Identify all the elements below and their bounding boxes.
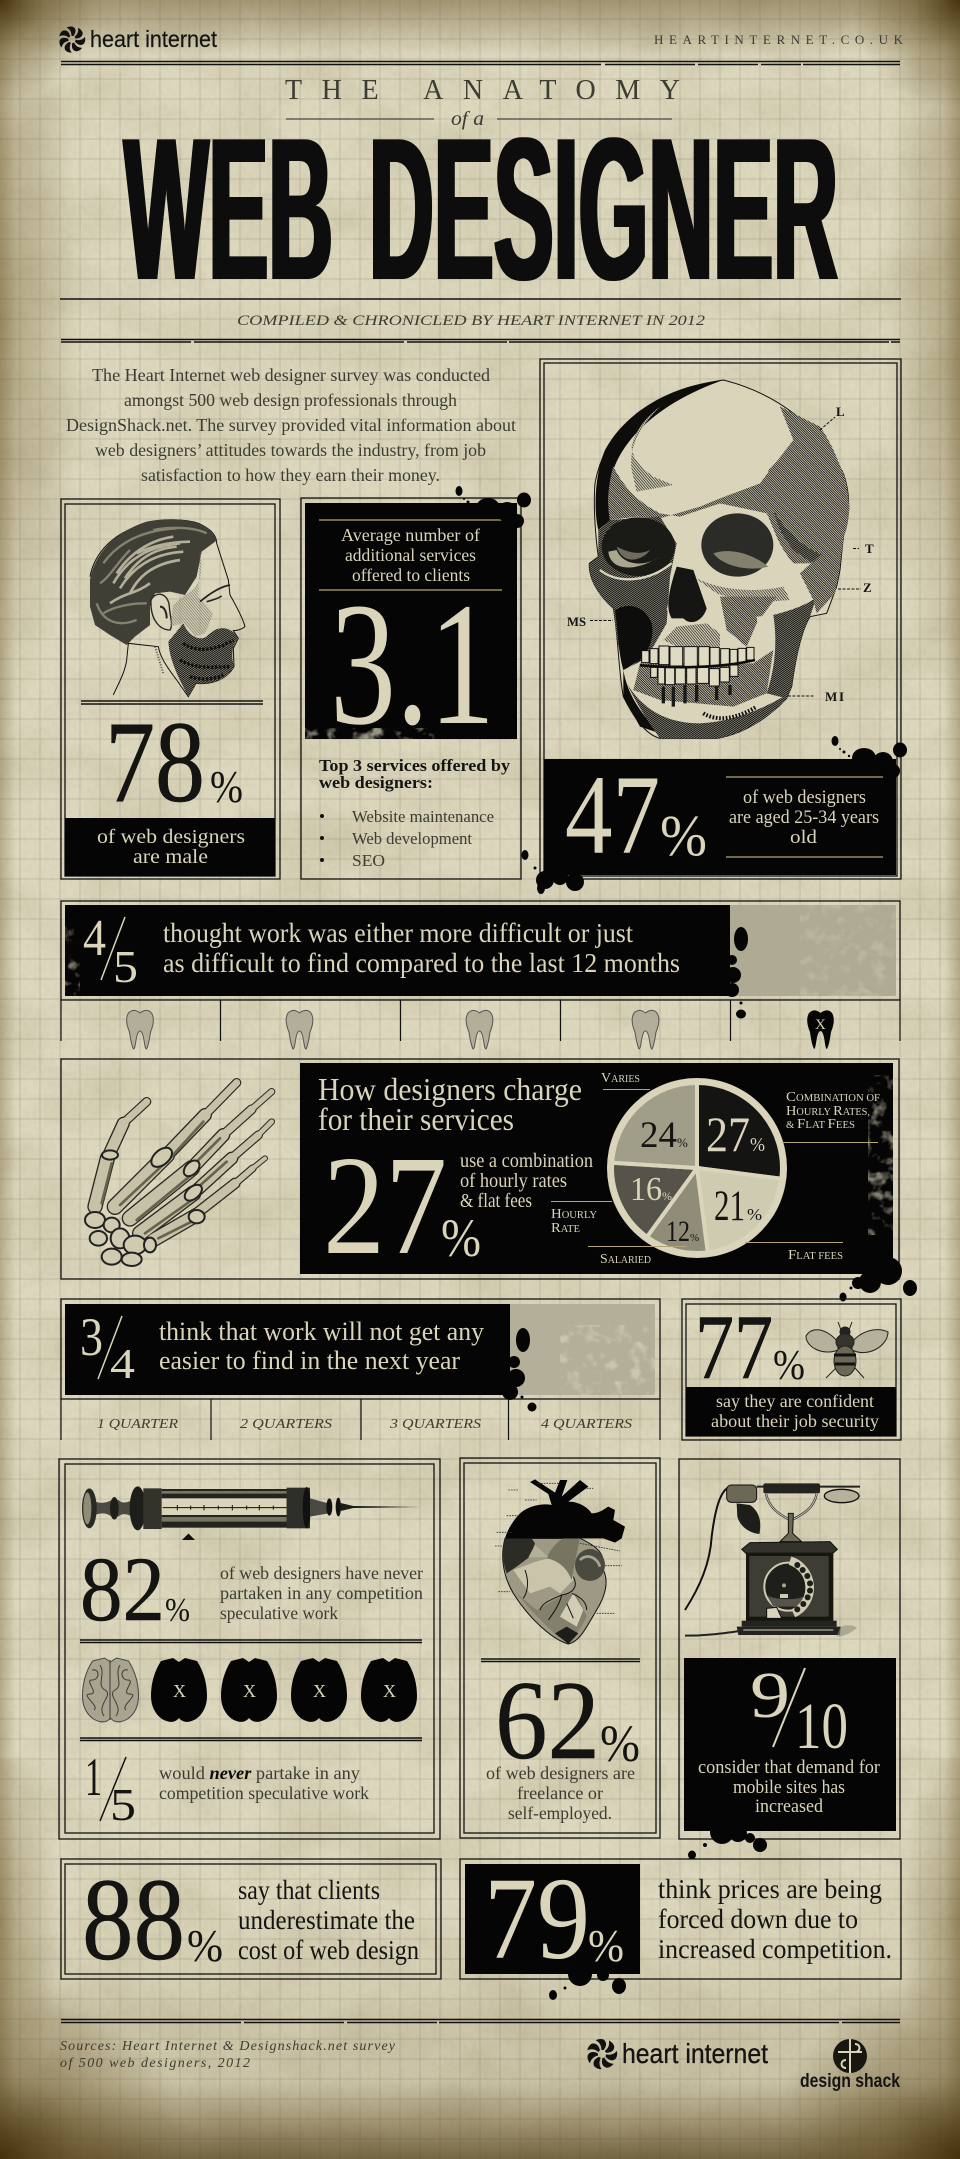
- black box: job security: say they are confident: [716, 1391, 874, 1411]
- top 3 services list: web designers:: [319, 773, 433, 792]
- stat: 82%: %: [165, 1592, 190, 1629]
- illustration: anatomical heart: [495, 1479, 625, 1644]
- stat: 27%: 27: [323, 1126, 447, 1284]
- panel: 82% speculative work: [59, 1459, 440, 1839]
- skull labels: T: [865, 541, 874, 556]
- black band: [65, 1304, 510, 1395]
- intro text: The Heart Internet web designer survey was conducted: [92, 365, 490, 385]
- black box: job security: about their job security: [711, 1411, 879, 1431]
- pie chart labels: SALARIED: [600, 1252, 651, 1267]
- quarters row: 1 QUARTER: [97, 1417, 178, 1432]
- intro text: amongst 500 web design professionals through: [124, 390, 457, 410]
- skull labels: Z: [863, 580, 872, 595]
- pie chart labels: FLAT FEES: [788, 1248, 843, 1263]
- title line: web designer: [124, 96, 838, 323]
- text: clients underestimate: cost of web design: [238, 1935, 419, 1965]
- pie chart labels: & FLAT FEES: [786, 1117, 855, 1132]
- footer logo: heart internet: heart internet: [622, 2038, 768, 2069]
- brain icons: 1 of 5: [82, 1658, 417, 1722]
- fraction: 4/5: 5: [113, 941, 138, 992]
- heading: [318, 1071, 582, 1137]
- fraction: 3/4: [80, 1307, 135, 1388]
- stat: 78%: 78: [105, 698, 205, 827]
- title line: the anatomy: THE ANATOMY: [285, 75, 680, 106]
- skull labels: MS: [567, 614, 586, 629]
- pie chart: %: [662, 1189, 672, 1203]
- text: would never partake: [159, 1763, 369, 1803]
- double rule: [81, 701, 263, 704]
- footer logo: design shack: [800, 2039, 900, 2092]
- texture strip: [730, 905, 896, 996]
- black box: 47% stat: 47: [565, 753, 660, 878]
- quarters row: 3 QUARTERS: [389, 1417, 481, 1432]
- text: freelance: freelance or: [517, 1783, 603, 1803]
- top 3 services list: [319, 756, 511, 870]
- black band: as difficult to find compared to the last 12 months: [163, 948, 680, 978]
- heading: How designers charge: [318, 1071, 582, 1107]
- pie chart: 27: [706, 1106, 750, 1162]
- stat: 88%: %: [187, 1920, 223, 1971]
- panel: 79% prices forced down: [460, 1853, 901, 2000]
- title line: of a: of a: [451, 108, 484, 130]
- icon: tooth: [466, 1010, 493, 1049]
- ink splat: [840, 1257, 917, 1302]
- pie chart: %: [677, 1135, 688, 1150]
- panel: how designers charge: [61, 1059, 917, 1302]
- black box: are male: [65, 818, 275, 876]
- sources: Sources: Heart Internet & Designshack.net survey: [60, 2039, 396, 2054]
- black box: 79%: [465, 1853, 640, 1984]
- black box: are male: are male: [133, 846, 208, 868]
- fraction: 1/5: [85, 1747, 136, 1830]
- skull labels: L: [836, 404, 845, 419]
- panel: 3.1 additional services: [301, 498, 521, 879]
- text: never partaken: [220, 1563, 423, 1623]
- sources: of 500 web designers, 2012: [60, 2056, 250, 2071]
- pie chart: 21: [714, 1183, 745, 1230]
- stat: 27%: of hourly rates: [460, 1170, 567, 1192]
- text: never partaken: partaken in any competition: [220, 1583, 423, 1603]
- text: freelance: [486, 1763, 635, 1823]
- black box: average services: 3.1: [330, 567, 495, 762]
- footer double rule: [61, 2020, 900, 2022]
- fraction: 9/10: 9: [750, 1659, 790, 1732]
- top 3 services list: Website maintenance: [352, 807, 494, 826]
- panel: 77% job security: [682, 1296, 901, 1440]
- black box: average services: offered to clients: [352, 565, 470, 585]
- icon: black tooth with X: [807, 1010, 834, 1049]
- stat: 88%: 88: [82, 1854, 185, 1985]
- quarters row: [61, 1399, 660, 1440]
- skull labels: MI: [825, 689, 844, 704]
- black box: demand for mobile: mobile sites has: [733, 1777, 845, 1798]
- black box: 47% stat: are aged 25-34 years: [729, 807, 879, 828]
- illustration: syringe: [82, 1486, 419, 1530]
- text: never partaken: speculative work: [220, 1603, 338, 1623]
- stat: 27%: [323, 1126, 593, 1284]
- icon: tooth: [127, 1010, 153, 1049]
- black box: 47% stat: %: [660, 803, 707, 868]
- stat: 27%: use a combination: [460, 1150, 593, 1172]
- stat: 77%: %: [773, 1343, 805, 1389]
- header logo: heart internet: heart internet: [90, 26, 218, 52]
- stat: 77%: 77: [695, 1296, 773, 1398]
- fraction: 3/4: 3: [80, 1307, 103, 1367]
- illustration: hand skeleton: [85, 1083, 272, 1266]
- stat: 82%: 82: [80, 1538, 165, 1640]
- black box: charging: [300, 1063, 893, 1284]
- top 3 services list: Web development: [352, 829, 472, 848]
- text: clients underestimate: [238, 1875, 419, 1965]
- illustration: skull: [589, 380, 849, 738]
- panel: 3/4 next year: [61, 1299, 660, 1412]
- fraction: 4/5: 4: [83, 910, 106, 967]
- title: [124, 75, 838, 323]
- text: clients underestimate: underestimate the: [238, 1905, 415, 1935]
- icon: black brain X: X: [243, 1681, 256, 1701]
- pie chart: %: [690, 1232, 699, 1244]
- text: never partaken: of web designers have never: [220, 1563, 423, 1583]
- top 3 services list: SEO: [352, 851, 385, 870]
- text: freelance: self-employed.: [508, 1803, 612, 1823]
- ink splat: [549, 1962, 626, 2000]
- black box: average services: [305, 503, 517, 762]
- black box: 79%: 79: [484, 1853, 590, 1984]
- ink splat: [725, 927, 748, 1018]
- text: freelance: of web designers are: [486, 1763, 635, 1783]
- intro text: web designers’ attitudes towards the industry, from job: [95, 440, 486, 460]
- stat: 27%: %: [441, 1208, 481, 1268]
- subtitle band: COMPILED & CHRONICLED BY HEART INTERNET IN 2012: [237, 313, 706, 329]
- fraction: 1/5: 1: [85, 1747, 102, 1807]
- black box: are male: of web designers: [97, 826, 245, 848]
- ink splat: [502, 1328, 536, 1412]
- icon: black brain X: [221, 1658, 277, 1722]
- icon: black tooth with X: X: [815, 1017, 826, 1033]
- panel: 88% underestimate: [61, 1854, 441, 1985]
- icon: black brain X: X: [383, 1681, 396, 1701]
- black band: easier to find in the next year: [159, 1346, 460, 1375]
- quarters row: 2 QUARTERS: [240, 1417, 332, 1432]
- pie chart labels: HOURLY RATES,: [786, 1104, 870, 1119]
- pie chart: 16: [630, 1171, 662, 1208]
- black box: average services: additional services: [345, 545, 476, 565]
- text: prices forced down: [658, 1874, 892, 1964]
- pie chart: 24: [640, 1115, 677, 1156]
- fraction: 3/4: 4: [110, 1342, 135, 1388]
- black box: 47% stat: of web designers: [743, 787, 866, 808]
- panel: 78% male: [61, 499, 280, 879]
- heading: for their services: [318, 1101, 514, 1137]
- pie chart labels: HOURLY: [551, 1207, 597, 1222]
- black box: job security: [686, 1387, 896, 1436]
- skull labels: [567, 404, 874, 704]
- stat: 62%: %: [600, 1716, 640, 1773]
- website address: HEARTINTERNET.CO.UK: [654, 32, 904, 47]
- text: prices forced down: increased competition.: [658, 1934, 892, 1964]
- footer logo: design shack: design shack: [800, 2071, 900, 2092]
- intro text: satisfaction to how they earn their money.: [141, 465, 440, 485]
- pie chart labels: COMBINATION OF: [786, 1090, 880, 1105]
- double rule: [481, 1659, 640, 1662]
- pie chart labels: VARIES: [601, 1071, 640, 1086]
- top 3 services list: Top 3 services offered by: [319, 756, 511, 775]
- black band: think that work will not get any: [159, 1317, 484, 1346]
- black band: [65, 905, 730, 996]
- sources: [60, 2039, 396, 2071]
- pie chart: %: [747, 1205, 762, 1224]
- fraction: 1/5: 5: [110, 1779, 136, 1830]
- ink splats around top panels: [456, 486, 907, 894]
- icon: black brain X: [361, 1658, 417, 1722]
- text: would never partake: would never partake in any: [159, 1763, 360, 1783]
- black box: demand for mobile: increased: [755, 1796, 823, 1817]
- fraction: 9/10: [750, 1659, 848, 1763]
- panel: 62% freelance: [460, 1458, 660, 1838]
- panel: 4/5 work harder to find: [61, 901, 900, 1018]
- pie chart: [607, 1078, 787, 1258]
- illustration: bearded man: [90, 519, 245, 697]
- illustration: vintage telephone: [685, 1483, 860, 1637]
- header double rule: [61, 62, 900, 64]
- intro text: DesignShack.net. The survey provided vital information about: [66, 415, 516, 435]
- text: prices forced down: think prices are being: [658, 1874, 882, 1904]
- fraction: 9/10: 10: [795, 1690, 848, 1763]
- black box: demand for mobile: consider that demand for: [698, 1757, 881, 1778]
- stat: 27%: & flat fees: [460, 1190, 532, 1212]
- stat: 62%: 62: [495, 1659, 600, 1783]
- icon: black brain X: [151, 1658, 207, 1722]
- icon: bee: [806, 1322, 888, 1378]
- fraction: 4/5: [83, 910, 138, 992]
- icon: tooth: [286, 1010, 313, 1049]
- texture strip: [510, 1304, 655, 1395]
- icon: black brain X: [291, 1658, 347, 1722]
- intro text: [66, 365, 516, 485]
- text: would never partake: competition speculative work: [159, 1783, 369, 1803]
- text: clients underestimate: say that clients: [238, 1875, 380, 1905]
- double rule: [80, 1738, 422, 1740]
- icon: black brain X: X: [313, 1681, 326, 1701]
- pie chart: %: [750, 1134, 765, 1156]
- pie chart labels: RATE: [551, 1221, 580, 1236]
- black box: demand for mobile: [684, 1658, 896, 1831]
- stat: 78%: %: [210, 762, 243, 812]
- title line: web designer: WEB: [124, 96, 333, 323]
- icon: brain: [82, 1658, 138, 1722]
- text: prices forced down: forced down due to: [658, 1904, 858, 1934]
- quarters row: 4 QUARTERS: [541, 1417, 632, 1432]
- panel: 9/10 mobile demand: [679, 1459, 900, 1860]
- marker triangle: [182, 1534, 195, 1540]
- icon: tooth: [632, 1010, 659, 1049]
- black box: 47% stat: [544, 753, 896, 878]
- pie chart labels: [551, 1071, 880, 1267]
- black box: average services: Average number of: [341, 525, 480, 545]
- black band: thought work was either more difficult or just: [163, 918, 633, 948]
- tooth row: 4 of 5: [61, 1000, 900, 1049]
- icon: black brain X: X: [173, 1681, 186, 1701]
- double rule: [80, 1640, 422, 1642]
- pie chart: 12: [666, 1215, 690, 1248]
- black box: 79%: %: [588, 1920, 624, 1971]
- panel: skull, 47% aged 25-34: [540, 359, 901, 879]
- ink splat: [688, 1820, 767, 1860]
- black box: 47% stat: old: [790, 827, 818, 848]
